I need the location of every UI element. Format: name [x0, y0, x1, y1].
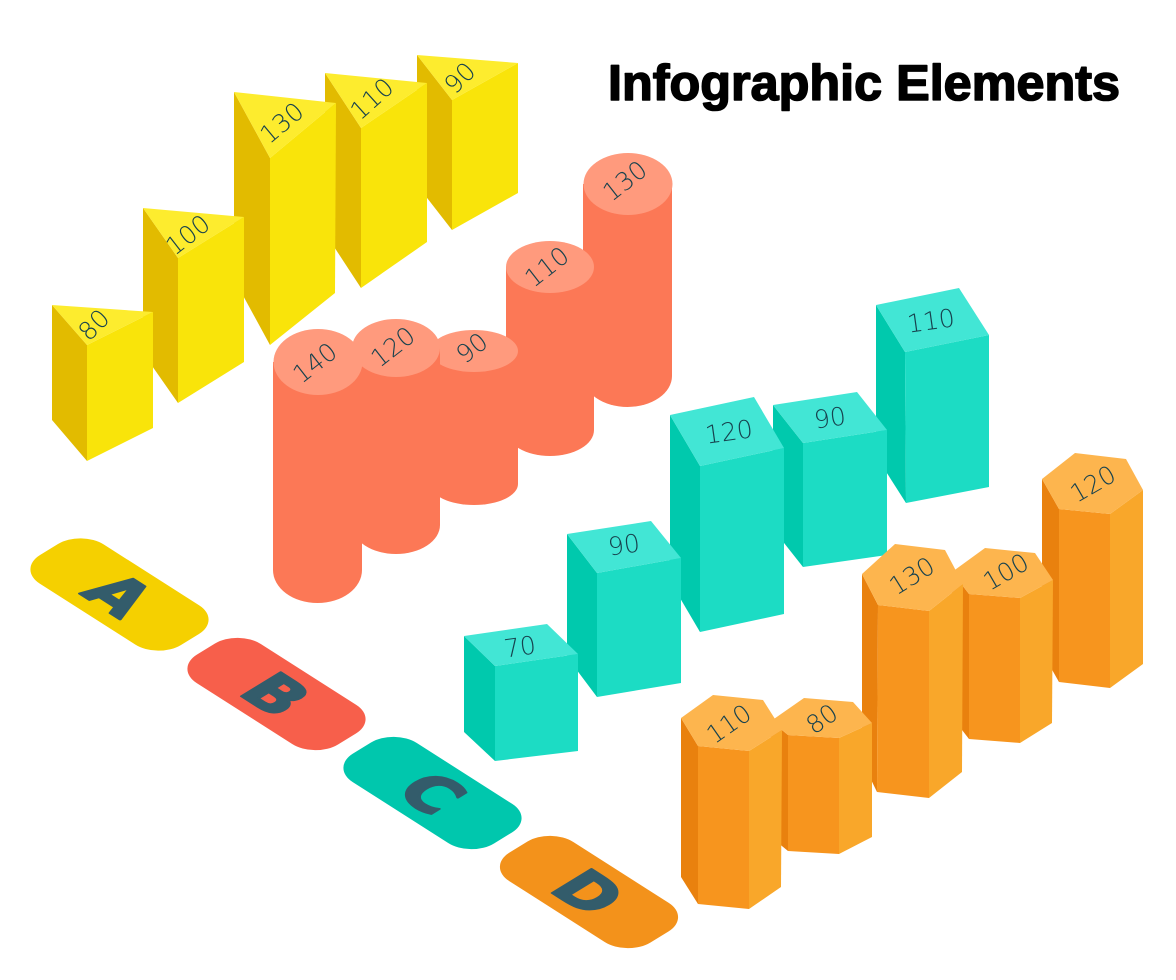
- box 90: 90: [606, 528, 642, 562]
- cylinder 90: 90: [451, 327, 493, 369]
- hex 130: 130: [884, 551, 940, 601]
- prism 110: [325, 72, 427, 288]
- chart: coral cylinders: [273, 153, 672, 603]
- cylinder 120: [352, 319, 440, 554]
- pill C: C: [381, 762, 482, 825]
- hex 120: [1042, 453, 1143, 688]
- cylinder 140: 140: [287, 337, 343, 389]
- box 120: 120: [703, 414, 755, 450]
- hex 110: [681, 695, 782, 909]
- box 110: [876, 288, 989, 503]
- pill B: B: [224, 663, 327, 727]
- box 70: [464, 624, 578, 761]
- prism 100: [143, 208, 244, 403]
- chart: orange hexagonal prisms: [681, 453, 1143, 909]
- box 70: 70: [502, 630, 538, 664]
- prism 100: 100: [160, 209, 216, 261]
- hex 100: [952, 548, 1053, 743]
- box 110: 110: [905, 303, 957, 339]
- box 90: 90: [812, 401, 848, 435]
- prism 90: [417, 55, 518, 230]
- hex 120: 120: [1065, 460, 1121, 508]
- chart: teal boxes: [464, 288, 989, 761]
- legend pills: [17, 530, 691, 957]
- hex 80: 80: [801, 698, 843, 740]
- cylinder 140: [273, 329, 362, 603]
- hex 110: 110: [701, 698, 757, 750]
- box 90: [567, 521, 681, 697]
- cylinder 120: 120: [365, 321, 421, 373]
- prism 80: [52, 303, 153, 461]
- cylinder 110: 110: [519, 241, 575, 293]
- pill A: A: [67, 563, 170, 628]
- hex 100: 100: [978, 548, 1034, 596]
- prism 90: 90: [438, 56, 482, 100]
- pill A: [17, 530, 222, 659]
- title: Infographic Elements: [608, 55, 1120, 111]
- cylinder 130: 130: [597, 155, 653, 207]
- chart: yellow triangular prisms: [52, 55, 518, 461]
- hex 130: [862, 544, 963, 798]
- prism 130: [234, 92, 336, 345]
- prism 80: 80: [72, 303, 116, 347]
- box 90: [773, 392, 887, 567]
- pill D: [486, 827, 691, 957]
- cylinder 130: [583, 153, 672, 407]
- cylinder 90: [430, 327, 518, 505]
- pill D: D: [535, 860, 641, 926]
- prism 110: 110: [345, 72, 399, 126]
- hex 80: [771, 698, 872, 854]
- pill B: [174, 629, 379, 759]
- pill C: [330, 728, 535, 858]
- prism 130: 130: [254, 97, 310, 149]
- cylinder 110: [506, 241, 594, 456]
- box 120: [670, 397, 784, 632]
